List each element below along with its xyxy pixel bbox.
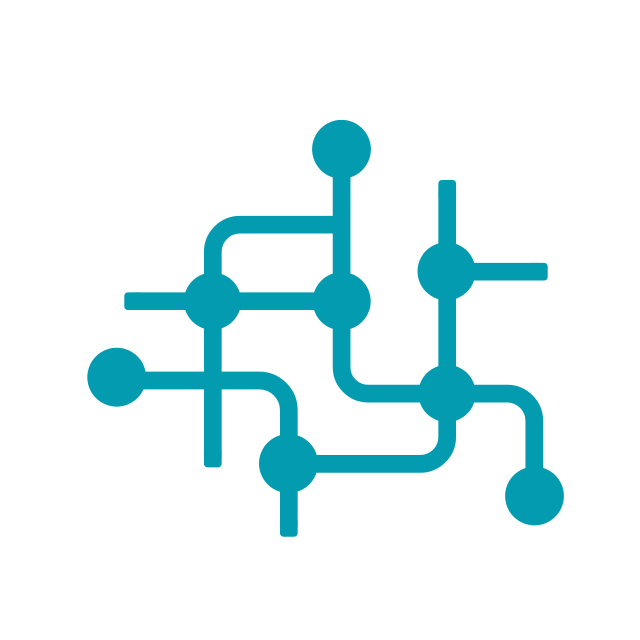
network nodes	[87, 120, 564, 525]
rounded line ends	[124, 180, 548, 537]
connector lines	[117, 150, 538, 527]
